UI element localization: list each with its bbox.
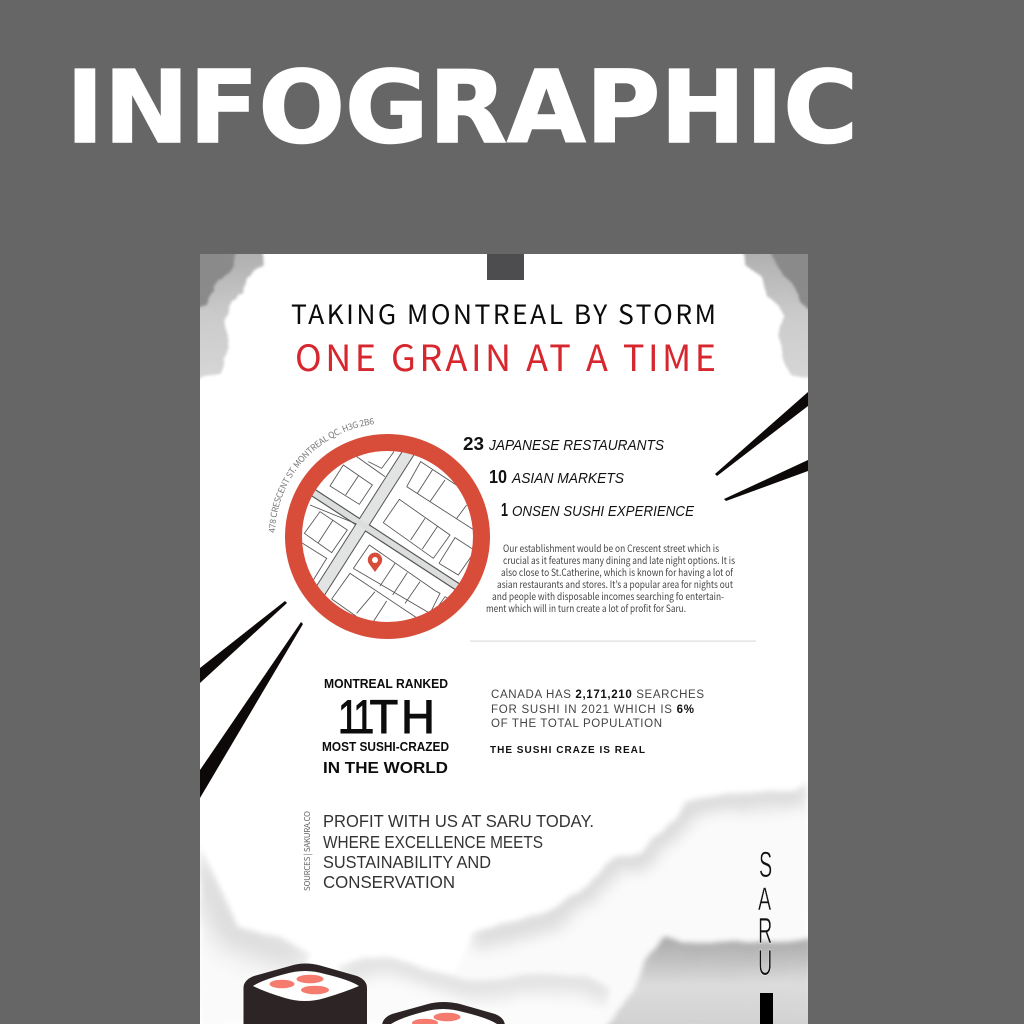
search statistics — [490, 689, 704, 756]
body paragraph: also close to St.Catherine, which is known for having a lot of — [501, 565, 734, 579]
brand name: SARU: U — [758, 944, 772, 984]
icon: chopsticks left — [200, 601, 303, 798]
hanging tab — [487, 254, 524, 280]
brand name: SARU: R — [758, 912, 772, 952]
stat: onsen — [502, 503, 694, 516]
brand name: SARU: A — [758, 881, 771, 917]
closing message: SUSTAINABILITY AND — [323, 852, 491, 872]
ranking block: IN THE WORLD — [323, 760, 448, 777]
sushi roll large — [244, 964, 367, 1024]
curved address: 478 CRESCENT ST. MONTREAL QC. H3G 2B6 — [269, 418, 374, 533]
closing message — [323, 815, 592, 888]
closing message: CONSERVATION — [323, 872, 455, 892]
body paragraph — [486, 541, 735, 615]
icon: map pin — [368, 553, 382, 572]
ranking block: 11 — [338, 691, 374, 744]
ranking block: MOST SUSHI-CRAZED — [322, 740, 449, 754]
sources note: SOURCES | SAKURA.CO — [302, 811, 313, 891]
stat: markets: 10 — [489, 467, 507, 487]
heading: TAKING MONTREAL BY STORM — [291, 293, 716, 332]
body paragraph: Our establishment would be on Crescent street which is — [503, 541, 719, 555]
main title: INFOGRAPHIC — [66, 49, 858, 166]
body paragraph: crucial as it features many dining and late night options. It is — [503, 553, 735, 567]
ink wash: top-left corner — [196, 250, 264, 380]
map locator — [269, 418, 490, 639]
body paragraph: and people with disposable incomes searching fo entertain- — [492, 589, 724, 603]
stat list — [463, 434, 695, 520]
panel: poster — [200, 254, 808, 1024]
heading — [292, 304, 714, 372]
ranking block: MONTREAL RANKED — [324, 677, 448, 691]
ranking block: TH — [370, 690, 435, 743]
stat: restaurants: 23 — [463, 434, 484, 454]
ranking block — [322, 677, 449, 777]
closing message: WHERE EXCELLENCE MEETS — [323, 832, 543, 852]
stat: restaurants — [464, 437, 664, 450]
stat: markets — [490, 470, 624, 483]
body paragraph: asian restaurants and stores. It’s a popular area for nights out — [497, 577, 733, 591]
red ring — [294, 442, 482, 630]
search statistics: OF THE TOTAL POPULATION — [491, 718, 662, 730]
ink wash: top-right corner — [744, 250, 812, 380]
closing message: PROFIT WITH US AT SARU TODAY. — [323, 811, 594, 831]
street map — [300, 445, 477, 622]
brand name: SARU — [758, 852, 772, 976]
icon: chopsticks top right — [715, 392, 808, 501]
stat: onsen: ONSEN SUSHI EXPERIENCE — [512, 503, 695, 520]
ink mountains — [196, 780, 812, 1024]
body paragraph: ment which will in turn create a lot of profit for Saru. — [486, 601, 686, 615]
search statistics: CANADA HAS 2,171,210 SEARCHES — [491, 689, 704, 701]
brand name: SARU: S — [759, 846, 772, 886]
sushi roll small — [382, 1002, 505, 1024]
search statistics: THE SUSHI CRAZE IS REAL — [490, 745, 645, 756]
search statistics: FOR SUSHI IN 2021 WHICH IS 6% — [491, 704, 694, 716]
heading: ONE GRAIN AT A TIME — [295, 330, 716, 382]
stat: onsen: 1 — [501, 500, 508, 520]
stat: markets: ASIAN MARKETS — [511, 470, 624, 487]
brand bar — [760, 993, 773, 1024]
stat: restaurants: JAPANESE RESTAURANTS — [488, 437, 664, 454]
